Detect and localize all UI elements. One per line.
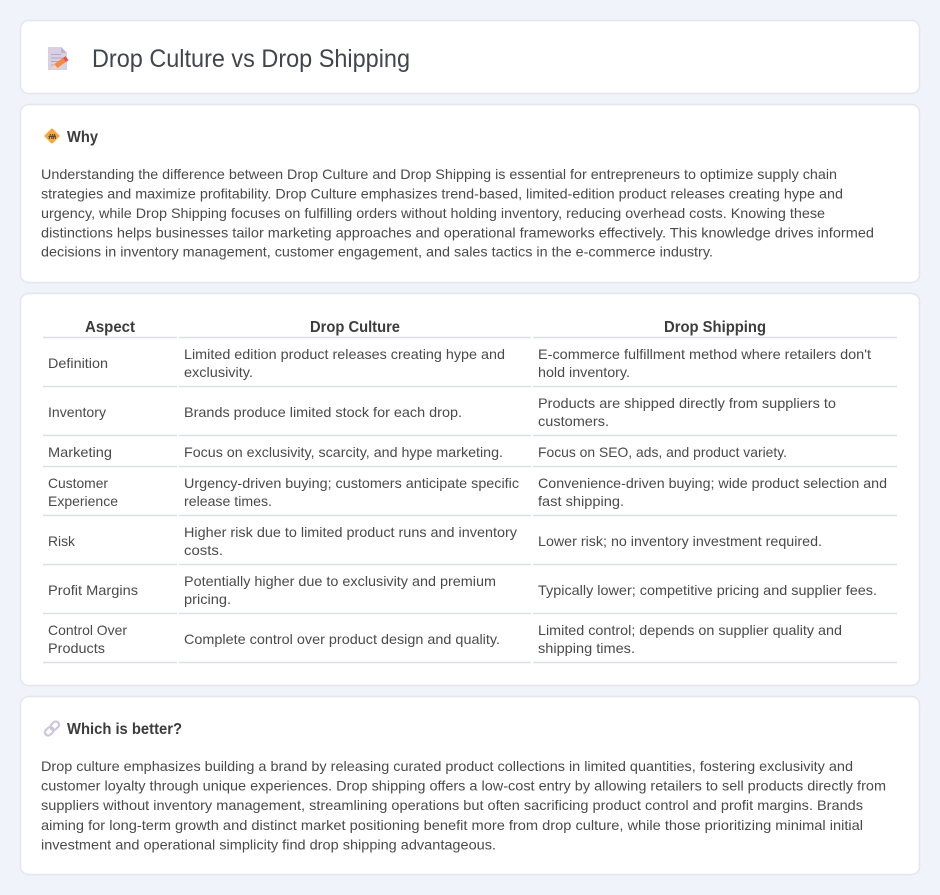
- row: inventory: [48, 395, 836, 429]
- row: customer experience: Customer: [48, 475, 108, 491]
- row: definition: [48, 346, 871, 380]
- row: control over products: shipping times.: [538, 640, 635, 656]
- row: risk: Risk: [48, 533, 76, 549]
- row: marketing: [48, 444, 787, 460]
- icon: chain link: [44, 720, 60, 737]
- row: control over products: Limited control; depends on supplier quality and: [538, 622, 842, 638]
- row: marketing: Focus on exclusivity, scarcity, and hype marketing.: [184, 444, 503, 460]
- text block: why paragraph: distinctions helps businesses tailor marketing approaches and operational frameworks effectively. This knowledge drives informed: [41, 224, 874, 240]
- row: customer experience: [48, 475, 887, 509]
- table header row: Aspect: [85, 319, 136, 336]
- row: risk: [48, 524, 822, 558]
- panel: title header: [20, 20, 920, 94]
- row: profit margins: Potentially higher due to exclusivity and premium: [184, 573, 496, 589]
- heading: which is better: Which is better?: [67, 721, 182, 738]
- text block: which is better paragraph: suppliers without inventory management, streamlining operations but often sacrificing product control and profit margins. Brands: [41, 797, 863, 813]
- icon: diamond sign: [44, 128, 60, 144]
- row: profit margins: Typically lower; competitive pricing and supplier fees.: [538, 582, 877, 598]
- text block: which is better paragraph: investment and operational simplicity find drop shipping advantageous.: [41, 836, 496, 852]
- row: control over products: [48, 622, 842, 656]
- row: profit margins: [48, 573, 877, 607]
- text block: which is better paragraph: Drop culture emphasizes building a brand by releasing curated product collections in limited quantities, fostering exclusivity and: [41, 758, 853, 774]
- text block: why paragraph: Understanding the difference between Drop Culture and Drop Shipping is essential for entrepreneurs to optimize supply chain: [41, 166, 837, 182]
- row: customer experience: Urgency-driven buying; customers anticipate specific: [184, 475, 519, 491]
- text block: why paragraph: decisions in inventory management, customer engagement, and sales tactics in the e-commerce industry.: [41, 244, 713, 260]
- row: definition: Limited edition product releases creating hype and: [184, 346, 505, 362]
- row: control over products: Complete control over product design and quality.: [184, 631, 500, 647]
- row: customer experience: Experience: [48, 493, 118, 509]
- row: risk: Lower risk; no inventory investment required.: [538, 533, 822, 549]
- row: risk: costs.: [184, 542, 223, 558]
- panel: why: [20, 104, 920, 282]
- row: inventory: Brands produce limited stock for each drop.: [184, 404, 462, 420]
- row: customer experience: release times.: [184, 493, 272, 509]
- panel: which is better: [20, 696, 920, 874]
- table header row: Drop Culture: [310, 319, 400, 336]
- icon: memo with pencil: [48, 47, 67, 70]
- row: inventory: Inventory: [48, 404, 106, 420]
- row: customer experience: fast shipping.: [538, 493, 624, 509]
- text block: why paragraph: urgency, while Drop Shipping focuses on fulfilling orders without holding inventory, reducing overhead costs. Knowing these: [41, 205, 825, 221]
- row: marketing: Focus on SEO, ads, and product variety.: [538, 444, 787, 460]
- row: marketing: Marketing: [48, 444, 112, 460]
- title: Drop Culture vs Drop Shipping: [92, 45, 410, 73]
- row: profit margins: pricing.: [184, 591, 231, 607]
- row: profit margins: Profit Margins: [48, 582, 138, 598]
- text block: which is better paragraph: [41, 758, 886, 852]
- row: inventory: Products are shipped directly from suppliers to: [538, 395, 836, 411]
- row: risk: Higher risk due to limited product runs and inventory: [184, 524, 517, 540]
- row: definition: hold inventory.: [538, 364, 630, 380]
- table header row: [85, 319, 766, 336]
- row: definition: E-commerce fulfillment method where retailers don't: [538, 346, 871, 362]
- row: inventory: customers.: [538, 413, 609, 429]
- row: control over products: Control Over: [48, 622, 127, 638]
- text block: why paragraph: strategies and maximize profitability. Drop Culture emphasizes trend-based, limited-edition product releases creating hype and: [41, 185, 843, 201]
- row: definition: exclusivity.: [184, 364, 253, 380]
- row: customer experience: Convenience-driven buying; wide product selection and: [538, 475, 887, 491]
- text block: which is better paragraph: customer loyalty through unique experiences. Drop shipping offers a low-cost entry by allowing retailers to sell products directly from: [41, 778, 886, 794]
- table header row: Drop Shipping: [664, 319, 766, 336]
- text block: which is better paragraph: aiming for long-term growth and distinct market positioning benefit more from drop culture, while those prioritizing minimal initial: [41, 817, 863, 833]
- row: control over products: Products: [48, 640, 105, 656]
- text block: why paragraph: [41, 166, 874, 260]
- heading: why: Why: [67, 129, 98, 146]
- panel: comparison table: [20, 294, 920, 686]
- row: definition: Definition: [48, 355, 108, 371]
